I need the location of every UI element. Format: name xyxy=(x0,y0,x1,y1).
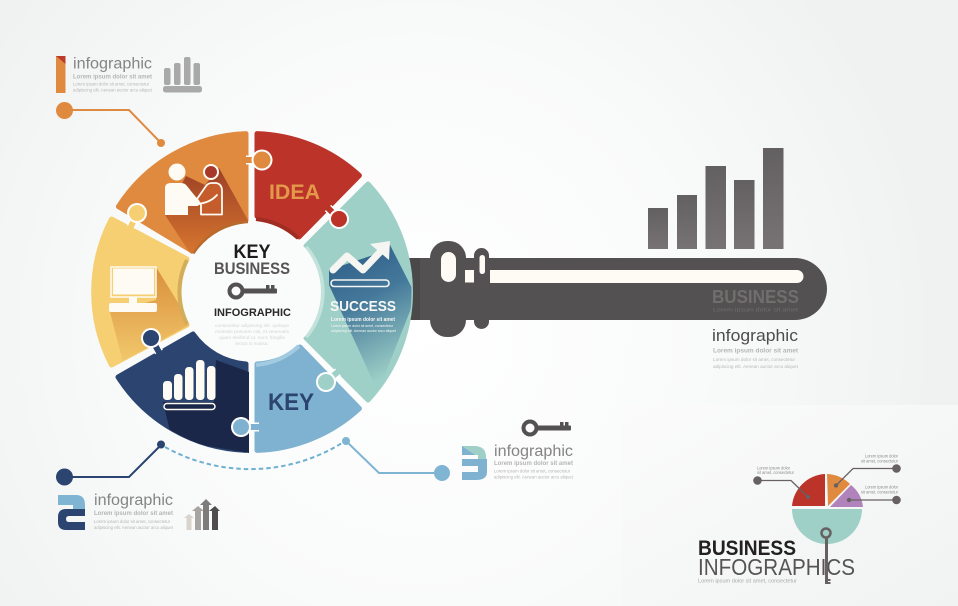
key slots xyxy=(441,252,804,283)
numeral 3 xyxy=(462,446,487,480)
bar chart xyxy=(648,148,784,249)
heading: business infographics xyxy=(698,537,855,584)
icon: center key xyxy=(230,284,277,298)
label: success xyxy=(330,298,397,333)
connector: dashed arc xyxy=(165,443,342,469)
text block: right infographic: infographic xyxy=(712,327,798,345)
segment: navy xyxy=(118,334,249,453)
center title xyxy=(214,242,291,319)
connector: navy xyxy=(56,440,165,486)
icon: white bars xyxy=(163,360,216,410)
segment: red xyxy=(256,134,359,238)
text block: section 3: Lorem ipsum dolor sit amet xyxy=(494,460,574,467)
segment: teal xyxy=(306,184,416,400)
icon: grey bars xyxy=(163,57,202,92)
bottom-right pie infographic xyxy=(698,454,901,584)
pie labels: sit amet, consectetur xyxy=(861,458,898,464)
key shaft xyxy=(405,241,827,337)
text: center description: quam eleifend ut. nunc fringilla xyxy=(219,335,285,340)
text: top-left description: Lorem ipsum dolor sit amet xyxy=(73,74,153,80)
text: top-left description: adipiscing elit. Aenean auctor arcu aliquet xyxy=(73,88,153,92)
pie labels xyxy=(757,454,898,494)
text: center description: molestie posuere nisi, et venenatis xyxy=(215,329,290,334)
label: success: Lorem ipsum dolor sit amet, consectetur xyxy=(331,324,394,328)
icon: handshake people xyxy=(165,164,222,215)
pie labels: sit amet, consectetur xyxy=(861,490,898,494)
center title: INFOGRAPHIC xyxy=(214,307,291,319)
segment: orange xyxy=(118,134,249,256)
text block: section 3: adipiscing elit. Aenean auctor arcu aliquet xyxy=(494,474,574,480)
puzzle wheel xyxy=(94,134,416,453)
label: success: Lorem ipsum dolor sit amet xyxy=(331,317,395,323)
puzzle knobs xyxy=(127,150,349,437)
text block: section 3 xyxy=(494,443,574,480)
icon: vertical key xyxy=(822,528,830,584)
pie labels: Lorem ipsum dolor xyxy=(757,466,790,470)
text block: section 2: Lorem ipsum dolor sit amet, consectetur xyxy=(94,519,170,524)
text block: section 2: infographic xyxy=(94,492,173,509)
label: key: KEY xyxy=(268,389,314,416)
connector: light blue xyxy=(342,437,450,481)
connectors xyxy=(753,464,901,504)
icon: computer xyxy=(109,267,157,312)
center title: BUSINESS xyxy=(214,259,290,278)
numeral 2 xyxy=(58,495,85,530)
text: business on key: Lorem ipsum dolor sit amet xyxy=(713,308,799,314)
label: success: adipiscing elit. Aenean auctor arcu aliquet xyxy=(331,329,397,333)
key handle with bars xyxy=(405,148,827,337)
segment: blue xyxy=(256,346,359,450)
icon: key above section 3 xyxy=(524,422,571,434)
icon: growth arrow xyxy=(331,241,390,286)
text block: section 2 xyxy=(94,492,174,530)
heading: business infographics: INFOGRAPHICS xyxy=(698,554,855,580)
text block: section 2: Lorem ipsum dolor sit amet xyxy=(94,510,174,517)
icon: orange marker xyxy=(56,56,66,93)
pie labels: sit amet, consectetur xyxy=(757,470,794,475)
text block: right infographic: Lorem ipsum dolor sit amet, consectetur xyxy=(713,357,795,362)
text block: right infographic xyxy=(712,327,799,369)
text: center description: consectetur adipiscing elit. quisque xyxy=(215,323,289,328)
text block: right infographic: Lorem ipsum dolor sit amet xyxy=(713,348,799,354)
text: center description xyxy=(215,323,290,346)
text block: section 3: infographic xyxy=(494,443,573,460)
text: top-left description: Lorem ipsum dolor sit amet, consectetur xyxy=(73,82,149,86)
text: center description: lectus in massa. xyxy=(236,341,268,346)
icon: rising arrows xyxy=(184,499,220,530)
text: business on key: BUSINESS xyxy=(712,287,799,307)
segment: yellow xyxy=(94,219,190,370)
pie labels: Lorem ipsum dolor xyxy=(865,484,898,490)
text block: right infographic: adipiscing elit. Aenean auctor arcu aliquet xyxy=(713,364,799,369)
pie chart xyxy=(792,474,863,544)
label: success: SUCCESS xyxy=(330,298,396,315)
heading: infographic top-left: infographic xyxy=(73,56,152,72)
header block: top-left infographic xyxy=(56,56,202,93)
heading: business infographics: Lorem ipsum dolor sit amet, consectetur xyxy=(698,578,797,584)
pie labels: Lorem ipsum dolor xyxy=(865,454,898,458)
label: idea: IDEA xyxy=(269,180,320,204)
center disc xyxy=(183,223,321,361)
connector: orange xyxy=(56,102,165,147)
text block: section 3: Lorem ipsum dolor sit amet, consectetur xyxy=(494,468,570,474)
text: top-left description xyxy=(73,74,153,92)
text block: section 2: adipiscing elit. Aenean auctor arcu aliquet xyxy=(94,525,174,530)
heading: business infographics: BUSINESS xyxy=(698,537,796,560)
center title: KEY xyxy=(234,242,271,263)
